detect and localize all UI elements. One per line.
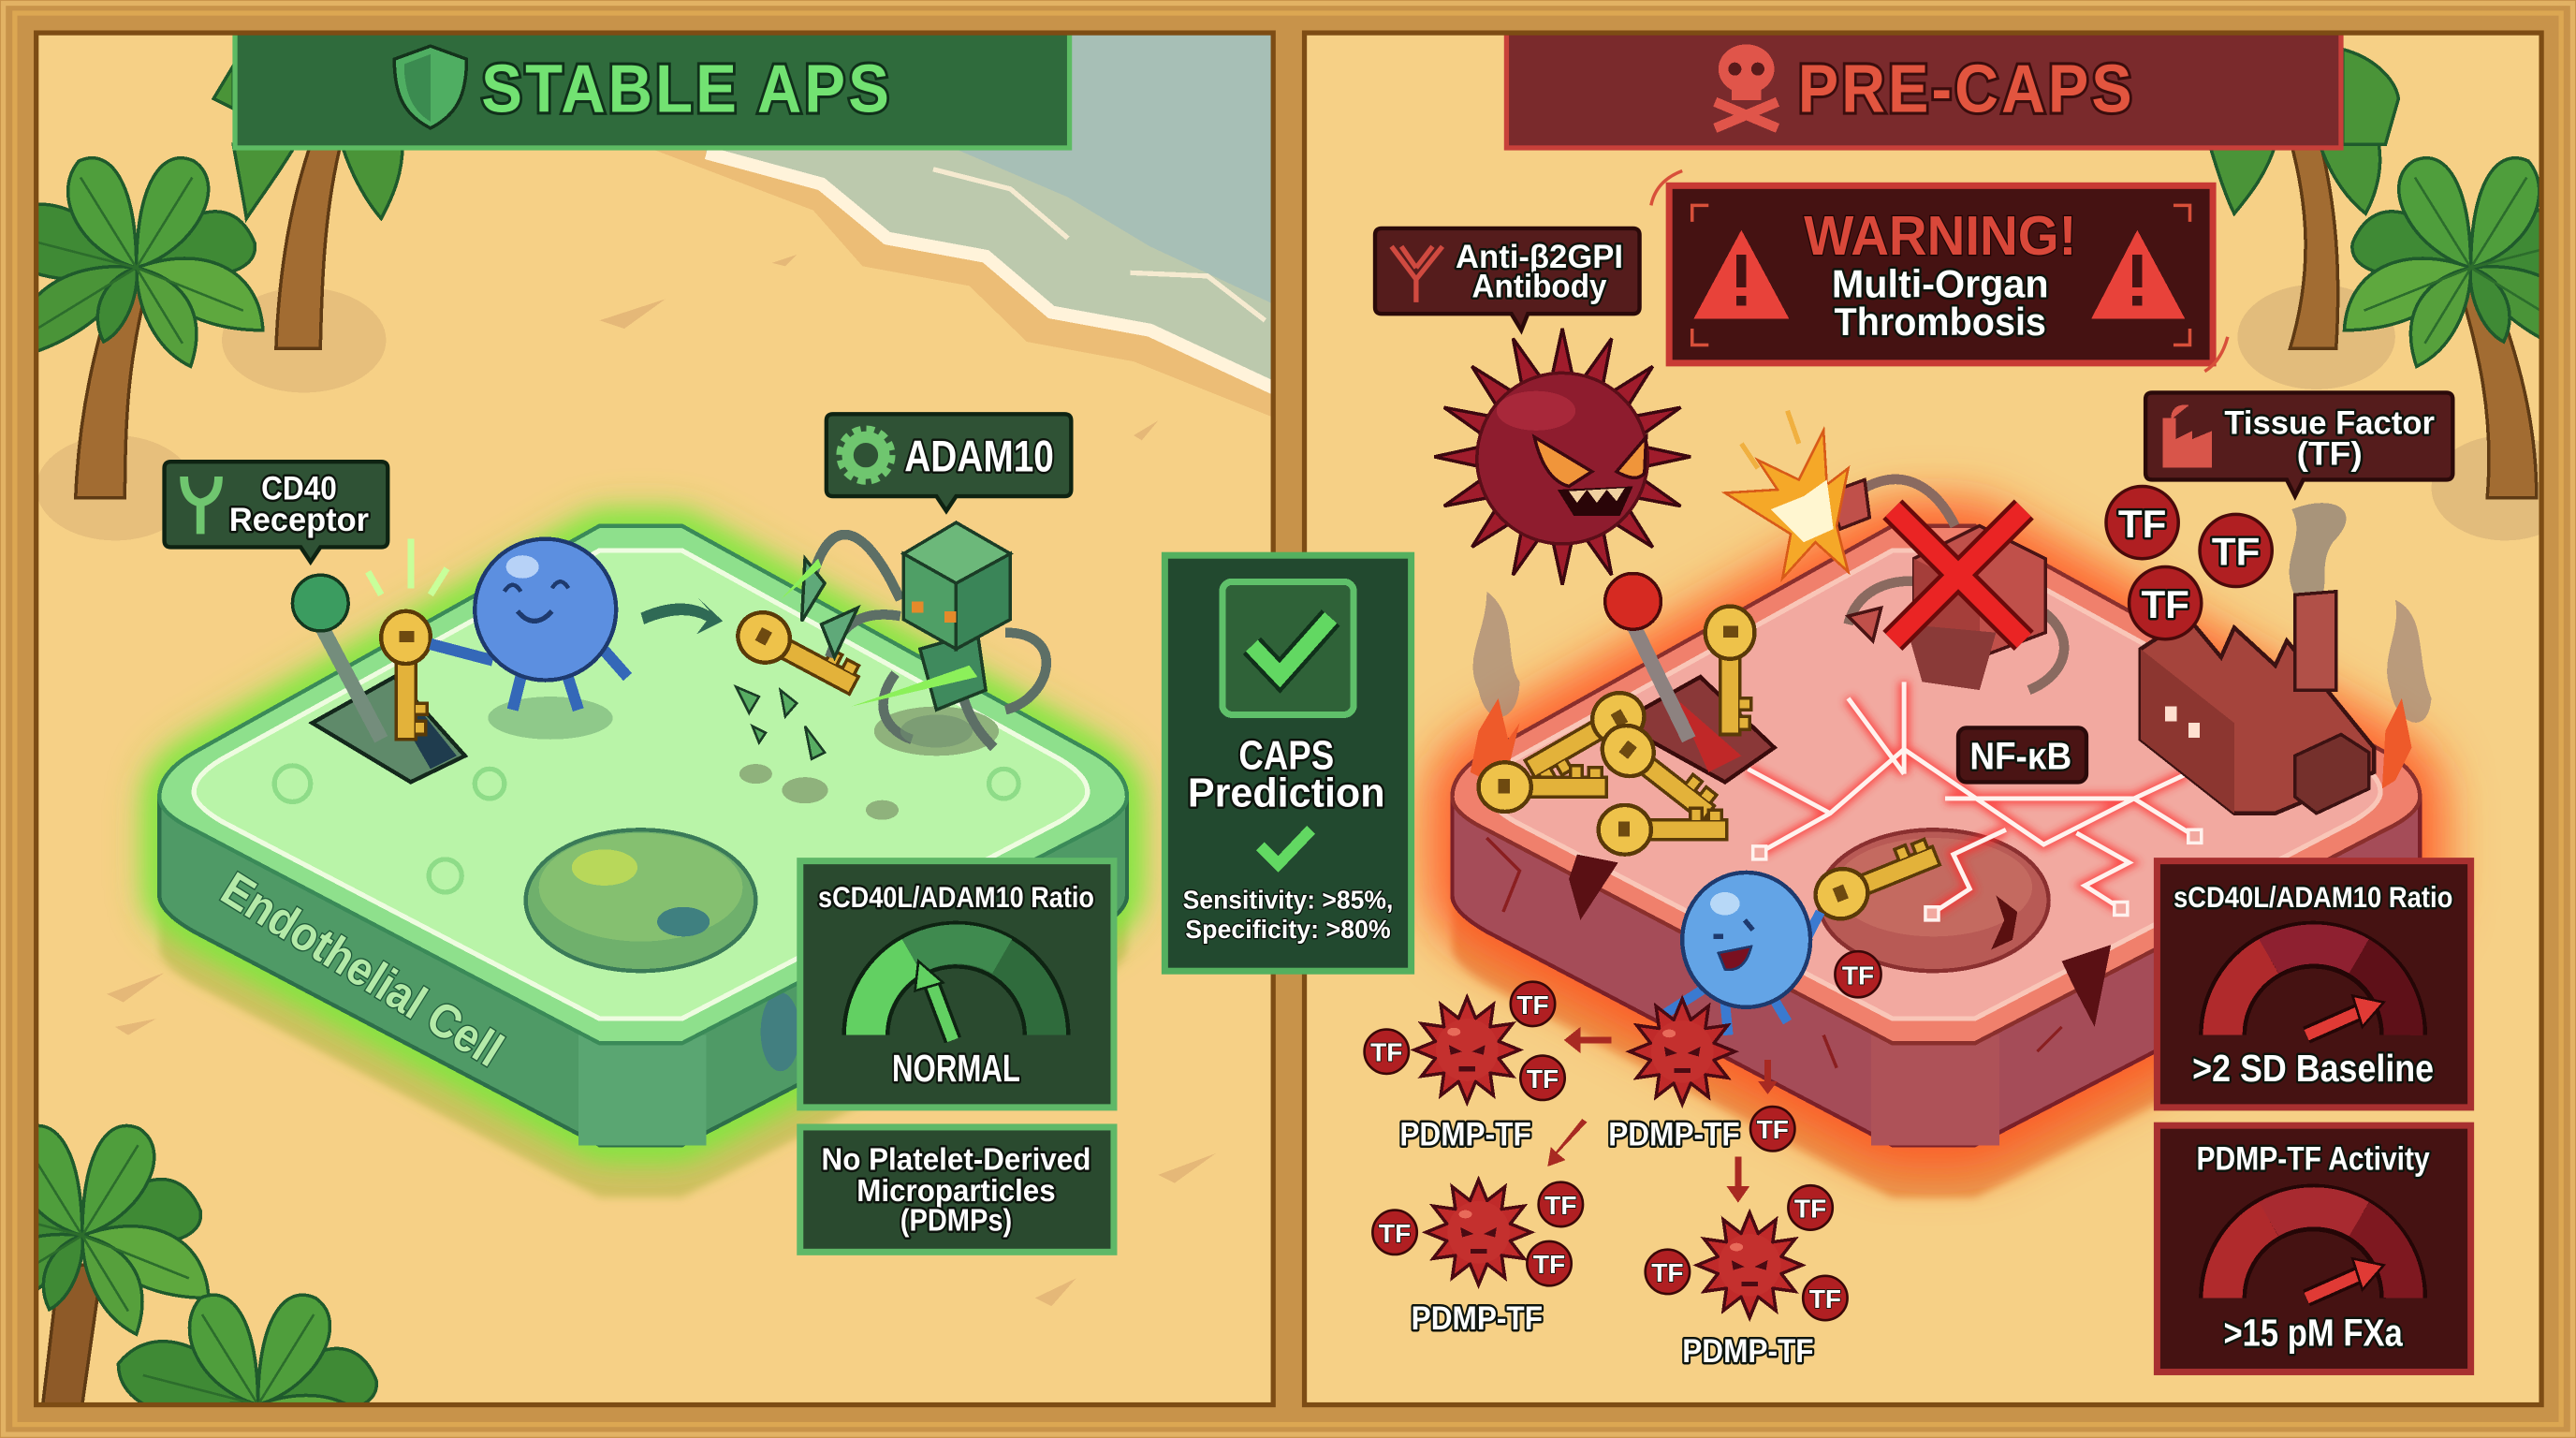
panel: warning: [1651, 171, 2228, 372]
golden keys on the cell: [1479, 607, 1945, 927]
PDMP cluster 1: TF: [1527, 1064, 1559, 1093]
palm tree: upper left: [38, 156, 264, 541]
anti-beta2GPI virus: [1434, 329, 1690, 585]
panel: ratio gauge elevated: >2 SD Baseline: [2192, 1047, 2434, 1090]
red X over robot: [1893, 509, 2024, 640]
TF markers large: [2106, 486, 2272, 639]
gauge: [2223, 1207, 2404, 1298]
palm tree: upper right: [2344, 158, 2576, 540]
TF markers large: TF: [2141, 582, 2189, 626]
PDMP cluster 2: TF: [1757, 1115, 1789, 1144]
panel: PDMP-TF activity gauge: [2157, 1125, 2471, 1372]
panel: no PDMPs: Microparticles: [856, 1174, 1056, 1209]
label: tissue factor: (TF): [2297, 436, 2363, 473]
lever activated: [1605, 574, 1774, 782]
panel: no PDMPs: [800, 1127, 1114, 1252]
cleaved key and fragments: [729, 604, 866, 759]
sand background: [37, 33, 1273, 1405]
explosion spark: [1725, 411, 1848, 579]
icon: checkmark box: [1222, 581, 1354, 714]
PDMP cluster 3: TF: [1544, 1191, 1576, 1220]
panel: CAPS prediction: Prediction: [1188, 770, 1385, 816]
sand background: [1305, 33, 2541, 1405]
panel: warning: Multi-Organ: [1832, 262, 2049, 306]
wall cracks: [1486, 838, 2111, 1068]
panel: stable APS beach scene: [0, 26, 1273, 1438]
label: anti-beta2GPI antibody: Anti-β2GPI: [1456, 239, 1623, 275]
label: tissue factor: [2145, 392, 2452, 496]
panel: PDMP-TF activity gauge: PDMP-TF Activity: [2197, 1141, 2430, 1178]
label: endothelial cell: Endothelial Cell: [212, 862, 512, 1077]
palm trees: lower left: [38, 1123, 378, 1402]
TF markers large: TF: [2212, 530, 2260, 574]
label: NF-kB: NF-κB: [1969, 734, 2071, 777]
PDMP cluster 2: PDMP-TF: [1608, 1116, 1740, 1152]
panel: ratio gauge normal: [800, 861, 1114, 1108]
PDMP cluster 3: TF: [1533, 1250, 1565, 1279]
label: CD40 receptor: CD40: [261, 471, 337, 507]
panel: no PDMPs: (PDMPs): [900, 1204, 1012, 1239]
PDMP cluster 1: TF: [1516, 990, 1549, 1020]
CD40 lever: [292, 539, 465, 782]
icon: antibody: [1392, 246, 1442, 302]
label: NF-kB: [1958, 727, 2086, 782]
golden key in lever: [381, 611, 431, 740]
nucleus: [274, 697, 1018, 971]
panel: stable header: STABLE APS: [481, 51, 892, 126]
panel: pre-CAPS header: [1506, 26, 2341, 148]
label: tissue factor: Tissue Factor: [2224, 404, 2435, 441]
PDMP cluster 4: TF: [1794, 1194, 1826, 1223]
fire and smoke: [1471, 592, 2431, 788]
icon: warning triangles: [1693, 230, 2185, 318]
panel: PDMP-TF activity gauge: >15 pM FXa: [2223, 1311, 2403, 1354]
label: ADAM10: [827, 414, 1071, 511]
lone TF marker: TF: [1842, 961, 1874, 990]
panel: CAPS prediction: Sensitivity: >85%,: [1183, 886, 1393, 915]
palm tree: behind header: [2210, 50, 2398, 389]
palm tree: behind header: [213, 66, 402, 392]
PDMP cluster 1: PDMP-TF: [1399, 1116, 1531, 1152]
PDMP cluster 4: [1646, 1185, 1848, 1370]
label: ADAM10: ADAM10: [904, 433, 1054, 482]
sea and shoreline: [649, 33, 1273, 418]
ADAM10 scissor robot: [781, 522, 1046, 748]
NF-kB signalling network: [1748, 682, 2202, 920]
panel: ratio gauge normal: sCD40L/ADAM10 Ratio: [818, 880, 1094, 914]
nucleus damaged: [1819, 829, 2049, 971]
panel: no PDMPs: No Platelet-Derived: [822, 1143, 1090, 1178]
panel divider border right: [1305, 33, 2541, 1405]
icon: skull and crossbones: [1715, 44, 1778, 128]
icon: small check: [1260, 829, 1311, 864]
panel: stable header: [235, 26, 1070, 148]
PDMP cluster 1: TF: [1370, 1038, 1402, 1067]
PDMP cluster 3: [1372, 1180, 1583, 1337]
panel: CAPS prediction: CAPS: [1238, 732, 1334, 778]
panel divider border left: [37, 33, 1273, 1405]
label: CD40 receptor: Receptor: [229, 502, 369, 538]
PDMP cluster 2: [1608, 999, 1794, 1152]
label: anti-beta2GPI antibody: Antibody: [1472, 269, 1607, 305]
gauge: [866, 944, 1046, 1040]
arrow: key released: [641, 598, 723, 634]
endothelial cell platform: [159, 526, 1127, 1197]
icon: gear: [840, 429, 892, 481]
panel: pre-CAPS scene: [1305, 26, 2576, 1405]
panel: pre-CAPS header: PRE-CAPS: [1798, 51, 2135, 126]
PDMP cluster 4: TF: [1651, 1258, 1684, 1287]
panel: ratio gauge normal: NORMAL: [892, 1047, 1020, 1090]
gauge: [2223, 944, 2404, 1035]
PDMP cluster 4: TF: [1809, 1284, 1841, 1313]
icon: factory: [2163, 405, 2211, 466]
PDMP cluster 4: PDMP-TF: [1682, 1333, 1814, 1370]
factory: tissue factor source: [2141, 503, 2374, 814]
blue monocyte cell: [431, 539, 627, 710]
label: CD40 receptor: [165, 462, 388, 562]
endothelial cell platform damaged: [1453, 526, 2431, 1197]
PDMP cluster 3: PDMP-TF: [1412, 1300, 1543, 1337]
icon: shield: [394, 46, 466, 128]
scissor robot disabled: [1828, 479, 2064, 690]
TF markers large: TF: [2118, 502, 2166, 546]
PDMP cluster 1: [1365, 982, 1565, 1152]
blue monocyte cell activated: [1662, 873, 1821, 1035]
arrows: PDMP spreading: [1547, 1027, 1778, 1203]
panel: warning: WARNING!: [1804, 204, 2076, 267]
panel: CAPS prediction: Specificity: >80%: [1185, 915, 1391, 944]
panel: warning: Thrombosis: [1835, 300, 2046, 344]
panel: CAPS prediction: [1164, 555, 1412, 971]
panel: ratio gauge elevated: [2157, 861, 2471, 1108]
sand marks: [107, 255, 1216, 1306]
lone TF marker: [1835, 951, 1881, 997]
panel: ratio gauge elevated: sCD40L/ADAM10 Ratio: [2174, 880, 2452, 914]
icon: Y receptor: [184, 477, 218, 534]
label: anti-beta2GPI antibody: [1375, 228, 1640, 330]
PDMP cluster 3: TF: [1379, 1219, 1411, 1248]
